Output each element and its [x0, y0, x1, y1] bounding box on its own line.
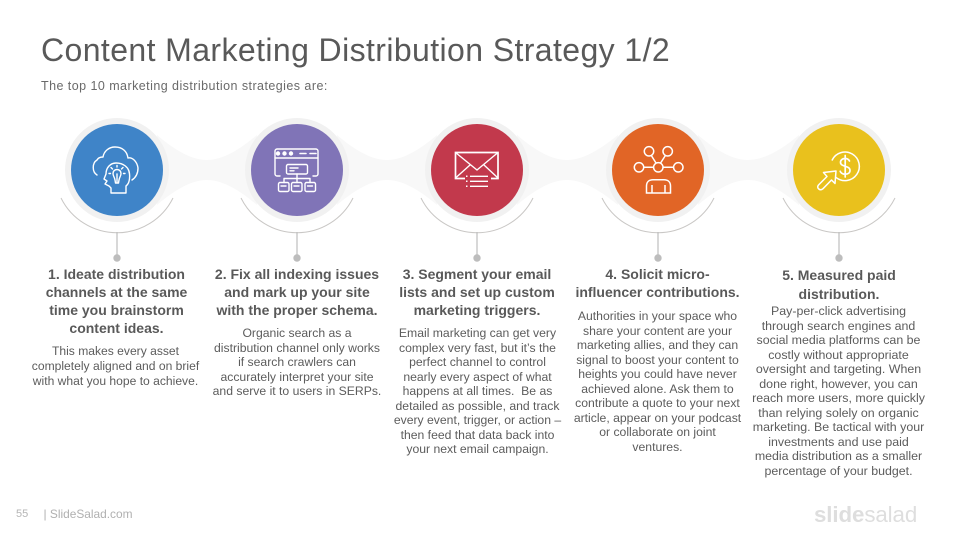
column 2 body: and serve it to users in SERPs.	[213, 384, 381, 398]
column 2 body	[213, 326, 381, 398]
column 4 body: signal to boost your content to	[576, 352, 739, 366]
column 5 heading: distribution.	[799, 286, 879, 302]
column 3 heading: lists and set up custom	[399, 284, 555, 300]
column 5 body: through search engines and	[762, 318, 915, 332]
column 4 body: article, appear on your podcast	[574, 410, 741, 424]
logo: slidesalad	[814, 502, 917, 527]
column 2 heading: and mark up your site	[224, 284, 370, 300]
column 1 heading: 1. Ideate distribution	[48, 266, 185, 282]
column 3 body: happens at all times. Be as	[403, 384, 552, 398]
column 2 heading: 2. Fix all indexing issues	[215, 266, 379, 282]
column 2 body: Organic search as a	[242, 326, 352, 340]
column 3 body: your next email campaign.	[406, 442, 549, 456]
column 5 body: investments and use paid	[768, 434, 909, 448]
column 1 body: This makes every asset	[52, 344, 179, 358]
icon: envelope with list	[456, 152, 498, 186]
column 5 heading	[782, 266, 896, 302]
title: Content Marketing Distribution Strategy 1/2	[41, 32, 670, 68]
column 4 body: share your content are your	[583, 324, 732, 338]
column 2 heading	[215, 266, 379, 318]
node 4: influencers	[602, 118, 714, 262]
icon: website hierarchy	[275, 149, 318, 192]
page number: 55	[16, 508, 28, 520]
column 4 body: achieved alone. Ask them to	[581, 382, 734, 396]
column 5 body: Pay-per-click advertising	[771, 304, 906, 318]
column 5 body	[752, 304, 925, 478]
column 3 body: Email marketing can get very	[399, 326, 556, 340]
process diagram	[60, 118, 896, 262]
column 3 body	[394, 326, 562, 456]
column 1 body	[32, 344, 200, 388]
column 3 heading: marketing triggers.	[414, 302, 540, 318]
column 1 heading: channels at the same	[46, 284, 187, 300]
column 3 body: perfect channel to control	[409, 355, 546, 369]
column 4 heading	[575, 266, 740, 300]
node 5: paid distribution	[783, 118, 895, 262]
column 2 heading: with the proper schema.	[216, 302, 378, 318]
column 5 body: social media platforms can be	[757, 333, 920, 347]
column 5 body: oversight and targeting. When	[756, 362, 921, 376]
connector band: 2 to 3	[337, 135, 437, 205]
node 3: email	[421, 118, 533, 262]
column 1 heading	[46, 266, 187, 336]
column 3 body: detailed as possible, and track	[396, 398, 559, 412]
column 3 body: nearly every aspect of what	[403, 370, 552, 384]
footer site name: | SlideSalad.com	[44, 507, 133, 521]
column 5 heading: 5. Measured paid	[782, 266, 896, 282]
column 5 body: marketing. Be tactical with your	[753, 420, 924, 434]
connector band: 1 to 2	[157, 135, 257, 205]
column 4 body: marketing allies, and they can	[577, 338, 738, 352]
column 3 heading: 3. Segment your email	[403, 266, 551, 282]
column 1 heading: time you brainstorm	[49, 302, 184, 318]
icon: network and person	[634, 147, 683, 193]
column 1 body: with what you hope to achieve.	[33, 374, 198, 388]
column 4 body: heights you could have never	[578, 367, 737, 381]
column 3 body: then feed that data back into	[401, 428, 554, 442]
column 1 heading: content ideas.	[69, 320, 164, 336]
icon: dollar coin and cursor	[818, 152, 859, 190]
column 5 body: than relying solely on organic	[758, 406, 919, 420]
column 5 body: done right, however, you can	[759, 376, 918, 390]
node 1: ideate	[61, 118, 173, 262]
column 2 body: distribution channel only works	[214, 340, 380, 354]
column 1 body: completely aligned and on brief	[32, 359, 199, 373]
column 2 body: accurately interpret your site	[220, 370, 374, 384]
column 2 body: if search crawlers can	[238, 355, 356, 369]
column 3 body: complex very fast, but it’s the	[399, 340, 556, 354]
column 5 body: costly without appropriate	[768, 348, 909, 362]
column 4 heading: influencer contributions.	[575, 284, 740, 300]
column 3 body: every event, trigger, or action –	[394, 413, 561, 427]
column 4 body: contribute a quote to your next	[575, 396, 740, 410]
icon: cloud and head with light bulb	[93, 147, 138, 193]
node 2: indexing	[241, 118, 353, 262]
column 5 body: percentage of your budget.	[764, 464, 913, 478]
column 4 heading: 4. Solicit micro-	[605, 266, 710, 282]
column 3 heading	[399, 266, 555, 318]
column 4 body	[574, 309, 742, 454]
connector band: 3 to 4	[517, 135, 618, 205]
column 4 body: ventures.	[632, 440, 683, 454]
column 4 body: Authorities in your space who	[578, 309, 737, 323]
connector band: 4 to 5	[698, 135, 799, 205]
subtitle: The top 10 marketing distribution strategies are:	[41, 79, 328, 93]
column 4 body: or collaborate on joint	[599, 425, 716, 439]
column 5 body: reach more users, more quickly	[752, 391, 925, 405]
column 5 body: media distribution as a smaller	[755, 449, 922, 463]
